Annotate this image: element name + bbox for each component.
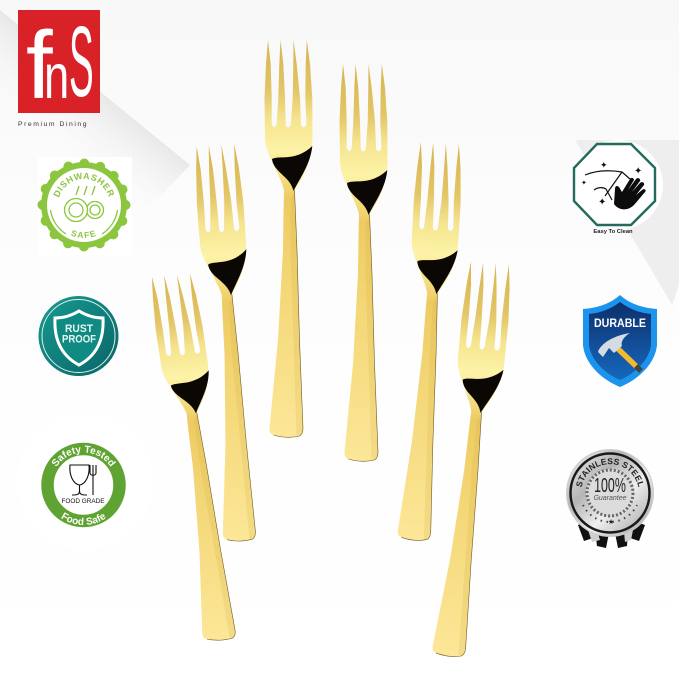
badge: stainless steel guarantee: ★	[608, 518, 614, 526]
badge: stainless steel guarantee	[566, 449, 654, 548]
badge: dishwasher safe: SAFE	[71, 230, 96, 238]
badge: food safe: Food Safe	[61, 512, 106, 525]
badge: food safe: FOOD GRADE	[62, 498, 104, 505]
badge: dishwasher safe	[38, 157, 132, 252]
badge: food safe	[41, 442, 126, 528]
badge: dishwasher safe: DISHWASHER	[53, 172, 114, 198]
badge: easy to clean	[573, 140, 663, 235]
badge: easy to clean: ✦	[581, 179, 587, 187]
badge: rust proof: RUST	[65, 323, 93, 335]
badge: easy to clean: ✦	[598, 197, 606, 208]
logo: FnS Premium Dining: n	[44, 41, 69, 112]
badge: stainless steel guarantee: STAINLESS STEEL	[576, 458, 644, 488]
badge: durable: DURABLE	[594, 318, 646, 330]
fork 6	[427, 261, 514, 658]
fork 2	[193, 144, 265, 542]
badge: rust proof: PROOF	[62, 334, 96, 346]
fork 3	[264, 40, 312, 437]
badge: easy to clean: Easy To Clean	[593, 229, 633, 235]
logo: FnS Premium Dining: Premium Dining	[18, 121, 88, 128]
badge: easy to clean: ✦	[634, 166, 642, 177]
badge: food safe: Safety Tested	[52, 446, 116, 467]
badge: stainless steel guarantee: Guarantee	[593, 495, 627, 502]
badge: durable	[583, 295, 657, 387]
fork 5	[392, 142, 464, 542]
badge: easy to clean: ✦	[600, 160, 608, 170]
fork 1	[148, 273, 246, 642]
icon: hammer	[598, 333, 641, 371]
fork 4	[340, 64, 388, 461]
badge: rust proof	[38, 296, 118, 376]
logo: FnS Premium Dining: f	[26, 12, 53, 119]
logo: FnS Premium Dining: S	[69, 6, 94, 117]
logo: FnS Premium Dining	[18, 6, 100, 128]
badge: stainless steel guarantee: 100%	[594, 474, 626, 497]
